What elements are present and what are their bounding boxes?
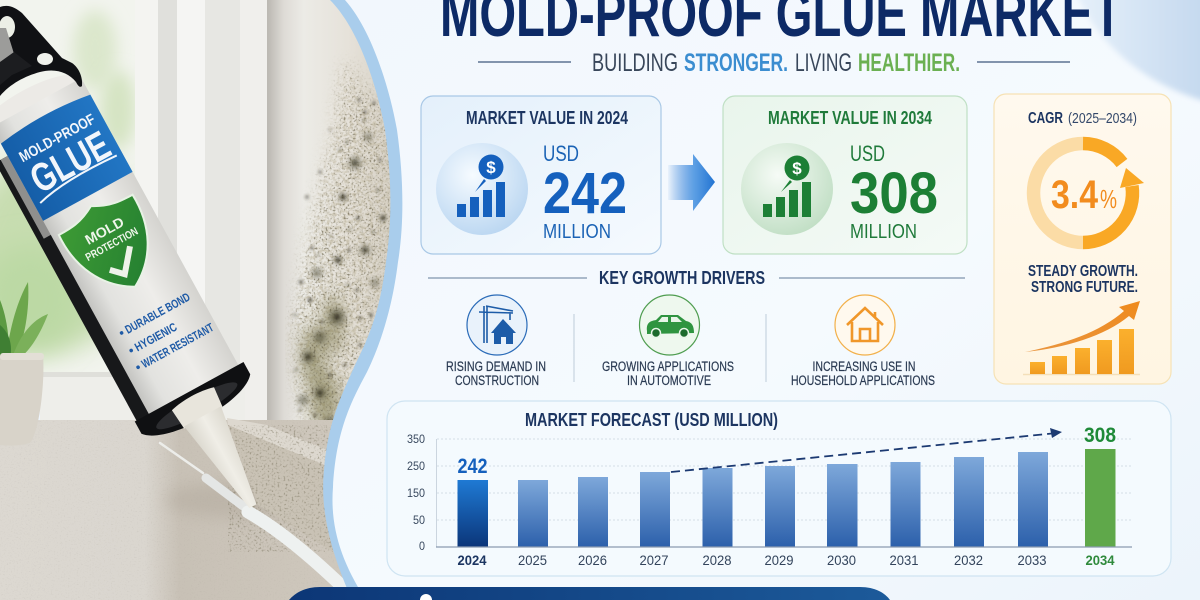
year labels: 2031	[890, 552, 919, 568]
panel: market value 2034: MILLION	[850, 221, 917, 243]
icon: crane and house	[467, 295, 527, 355]
panel: CAGR: (2025–2034)	[1068, 111, 1137, 127]
subtitle tagline: HEALTHIER.	[858, 49, 960, 77]
tube body	[0, 63, 90, 150]
y axis labels: 50	[413, 513, 425, 527]
year labels: 2028	[702, 552, 732, 568]
sealant bead	[160, 443, 348, 592]
benefit list: WATER RESISTANT	[139, 320, 216, 371]
icon: house	[835, 295, 895, 355]
shield: mold protection: PROTECTION	[84, 225, 140, 264]
panel: CAGR: %	[1100, 184, 1117, 214]
panel: market forecast chart: 308	[1084, 424, 1116, 447]
blue label	[0, 91, 133, 221]
heading: key growth drivers: KEY GROWTH DRIVERS	[599, 268, 765, 288]
icon: growth coin blue	[436, 143, 528, 235]
subtitle tagline: BUILDING	[592, 49, 678, 77]
counter top	[0, 420, 345, 600]
year labels: 2032	[954, 552, 983, 568]
bars	[458, 449, 1116, 547]
wall with mold	[267, 0, 390, 420]
panel: CAGR: STEADY GROWTH.	[1028, 263, 1138, 280]
driver: household	[791, 295, 935, 388]
year labels	[458, 552, 1115, 568]
panel: market value 2034: MARKET VALUE IN 2034	[768, 108, 932, 128]
benefit list: HYGIENIC	[132, 320, 180, 354]
granite ledge	[227, 418, 333, 552]
glue cartridge	[0, 60, 306, 536]
donut gauge	[1034, 144, 1144, 242]
chart title: MARKET FORECAST (USD MILLION)	[525, 409, 778, 430]
plunger end with collar	[0, 6, 82, 96]
driver: automotive: IN AUTOMOTIVE	[627, 373, 711, 388]
panel: market value 2034: USD	[850, 141, 885, 166]
cartridge side strip	[0, 155, 153, 428]
icon: car	[640, 295, 700, 355]
blue label: MOLD-PROOF	[16, 111, 98, 166]
panel: CAGR	[994, 94, 1171, 384]
panel: market value 2024: USD	[543, 141, 579, 166]
window frame	[40, 0, 268, 425]
driver: automotive	[602, 295, 734, 388]
y axis labels	[407, 432, 425, 553]
photo: glue tube applied on a moldy window sill	[0, 0, 403, 600]
window view with blurred greenery	[0, 0, 145, 375]
icon: growth coin green: $	[792, 159, 802, 178]
black end cap	[135, 362, 258, 448]
arrow: 2024 to 2034	[668, 154, 715, 211]
icon: growth coin blue: $	[486, 158, 496, 177]
benefit list: DURABLE BOND	[123, 290, 193, 337]
blue label: GLUE	[23, 123, 118, 202]
panel: CAGR: STRONG FUTURE.	[1031, 279, 1138, 296]
driver: automotive: GROWING APPLICATIONS	[602, 359, 734, 374]
panel: market value 2024	[421, 96, 661, 254]
mini bar chart with arrow	[1023, 301, 1140, 374]
panel: market value 2024: MILLION	[543, 221, 611, 243]
year labels: 2025	[518, 552, 547, 568]
panel: CAGR: 3.4	[1051, 173, 1099, 217]
year labels: 2030	[827, 552, 856, 568]
potted plant	[0, 282, 48, 446]
driver: construction: CONSTRUCTION	[455, 373, 539, 388]
panel: market value 2034	[723, 96, 967, 254]
y axis labels: 150	[407, 486, 425, 500]
dashed trend arrow	[671, 428, 1062, 472]
year labels: 2024	[458, 552, 487, 568]
driver: household: INCREASING USE IN	[812, 359, 916, 374]
panel: market forecast chart	[387, 401, 1171, 576]
y axis labels: 0	[419, 539, 425, 553]
subtitle tagline: LIVING	[795, 49, 852, 77]
driver: construction: RISING DEMAND IN	[446, 359, 546, 374]
year labels: 2034	[1086, 552, 1115, 568]
year labels: 2029	[764, 552, 794, 568]
y axis labels: 250	[407, 459, 425, 473]
footer banner	[289, 587, 890, 600]
year labels: 2026	[578, 552, 607, 568]
shield: mold protection: MOLD	[82, 214, 127, 248]
shield: mold protection	[54, 186, 172, 307]
panel: CAGR: CAGR	[1028, 110, 1063, 127]
right panel background with wave edge	[323, 0, 1200, 600]
icon: growth coin green	[741, 143, 833, 235]
panel: market value 2024: 242	[543, 161, 627, 226]
year labels: 2027	[640, 552, 669, 568]
subtitle tagline	[478, 49, 1070, 77]
panel: market value 2024: MARKET VALUE IN 2024	[466, 108, 628, 128]
driver: household: HOUSEHOLD APPLICATIONS	[791, 373, 935, 388]
subtitle tagline: STRONGER.	[684, 49, 788, 77]
benefit list	[115, 287, 216, 374]
panel: market value 2034: 308	[850, 161, 938, 226]
driver: construction	[446, 295, 546, 388]
value labels: 242	[458, 455, 488, 478]
nozzle	[170, 385, 273, 518]
year labels: 2033	[1018, 552, 1047, 568]
y axis labels: 350	[407, 432, 425, 446]
